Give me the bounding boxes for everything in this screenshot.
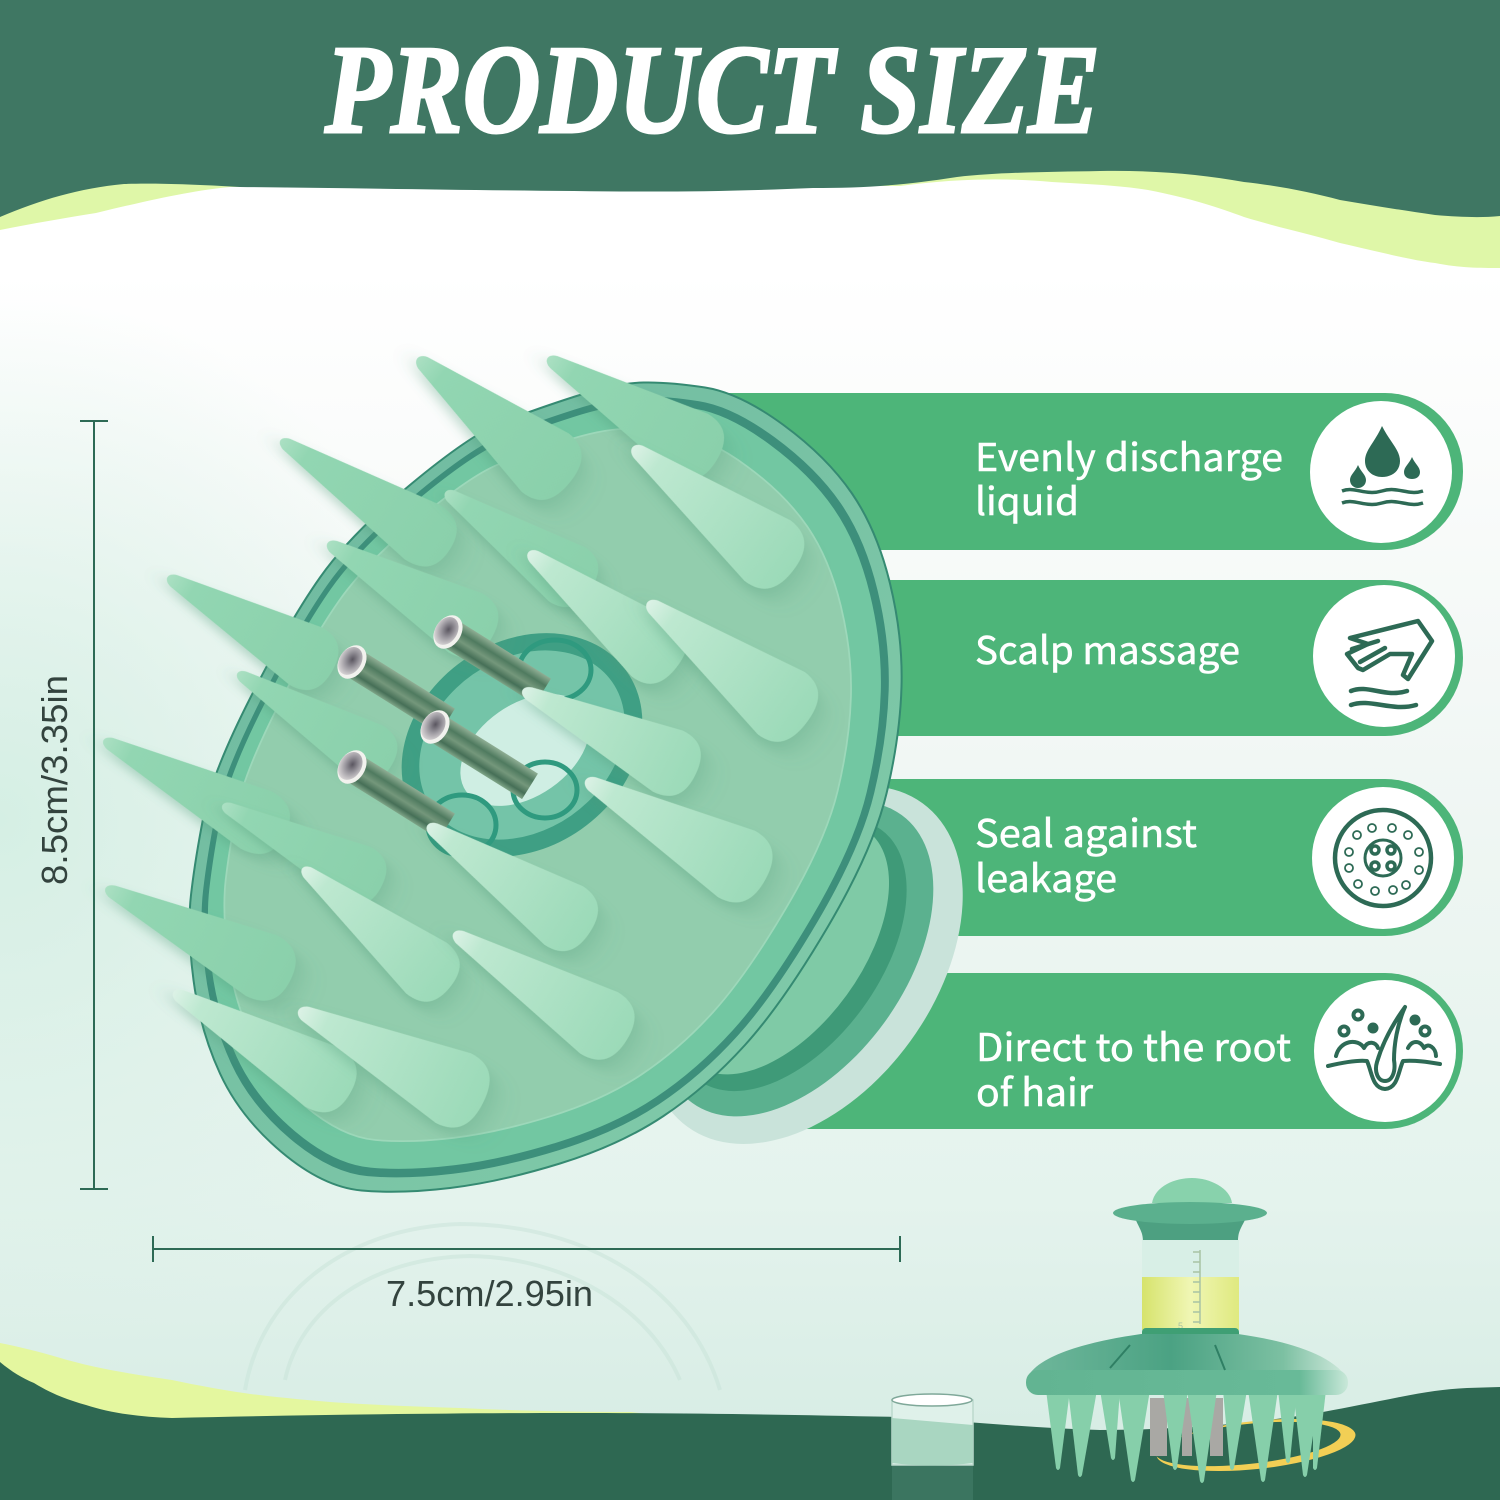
main product: scalp massager (88, 328, 1028, 1203)
width label: 7.5cm/2.95in (386, 1273, 593, 1314)
measuring scale (1193, 1250, 1200, 1324)
title: PRODUCT SIZE (324, 21, 1100, 160)
cap disc (1113, 1202, 1267, 1224)
feature bar: direct to the root of hair: Direct to the root (976, 1017, 1291, 1072)
feature bar: direct to the root of hair: of hair (976, 1062, 1093, 1117)
rim groove (202, 396, 889, 1177)
icon: hair root (1328, 1007, 1440, 1089)
inner rim band (208, 404, 881, 1169)
feature bar: seal against leakage: Seal against (975, 803, 1197, 858)
reflection of product (245, 1224, 720, 1390)
left background tint (0, 280, 500, 1380)
small product: full view with liquid (1026, 1178, 1358, 1483)
glass cylinder (1142, 1240, 1239, 1332)
feature bar: evenly discharge liquid: Evenly discharge (975, 427, 1283, 482)
measuring cup (892, 1394, 973, 1500)
metal tubes below (1150, 1398, 1223, 1456)
dimension: width line (153, 1236, 900, 1262)
scale number: 5 (1178, 1321, 1183, 1331)
bottom lime wave accent (0, 1343, 700, 1440)
knob (1152, 1178, 1232, 1203)
yellow floor ring (1153, 1411, 1358, 1479)
bristles (1046, 1390, 1326, 1483)
dimension: height line (80, 421, 108, 1190)
icon: water drops (1342, 426, 1423, 504)
height label: 8.5cm/3.35in (34, 675, 75, 885)
dome seams (1110, 1345, 1225, 1370)
disc rim (189, 382, 902, 1192)
body rim (1026, 1370, 1348, 1395)
feature bar: seal against leakage: leakage (975, 848, 1117, 903)
feature bar: evenly discharge liquid (700, 393, 1463, 550)
liquid (1142, 1277, 1239, 1330)
icon: seal disc (1335, 810, 1431, 906)
metal applicator tubes (331, 610, 553, 842)
bottom floor band (0, 1362, 1500, 1500)
back silicone bristles (88, 328, 830, 913)
feature bar: seal against leakage (860, 779, 1463, 936)
feature bar: evenly discharge liquid: liquid (975, 471, 1079, 526)
icon: massaging hand (1347, 621, 1432, 707)
feature bar: scalp massage: Scalp massage (975, 620, 1240, 675)
handle behind the disc (582, 727, 1028, 1203)
front silicone bristles (90, 660, 784, 1138)
silicone pad (224, 429, 851, 1141)
top lime wave accent (0, 150, 1500, 268)
feature bar: scalp massage (800, 580, 1463, 736)
feature bar: direct to the root of hair (800, 973, 1463, 1129)
cap flare (1135, 1218, 1246, 1242)
top header band (0, 0, 1500, 217)
cylinder base band (1142, 1328, 1239, 1338)
body dome (1027, 1334, 1347, 1378)
central nozzle plate (358, 587, 686, 903)
